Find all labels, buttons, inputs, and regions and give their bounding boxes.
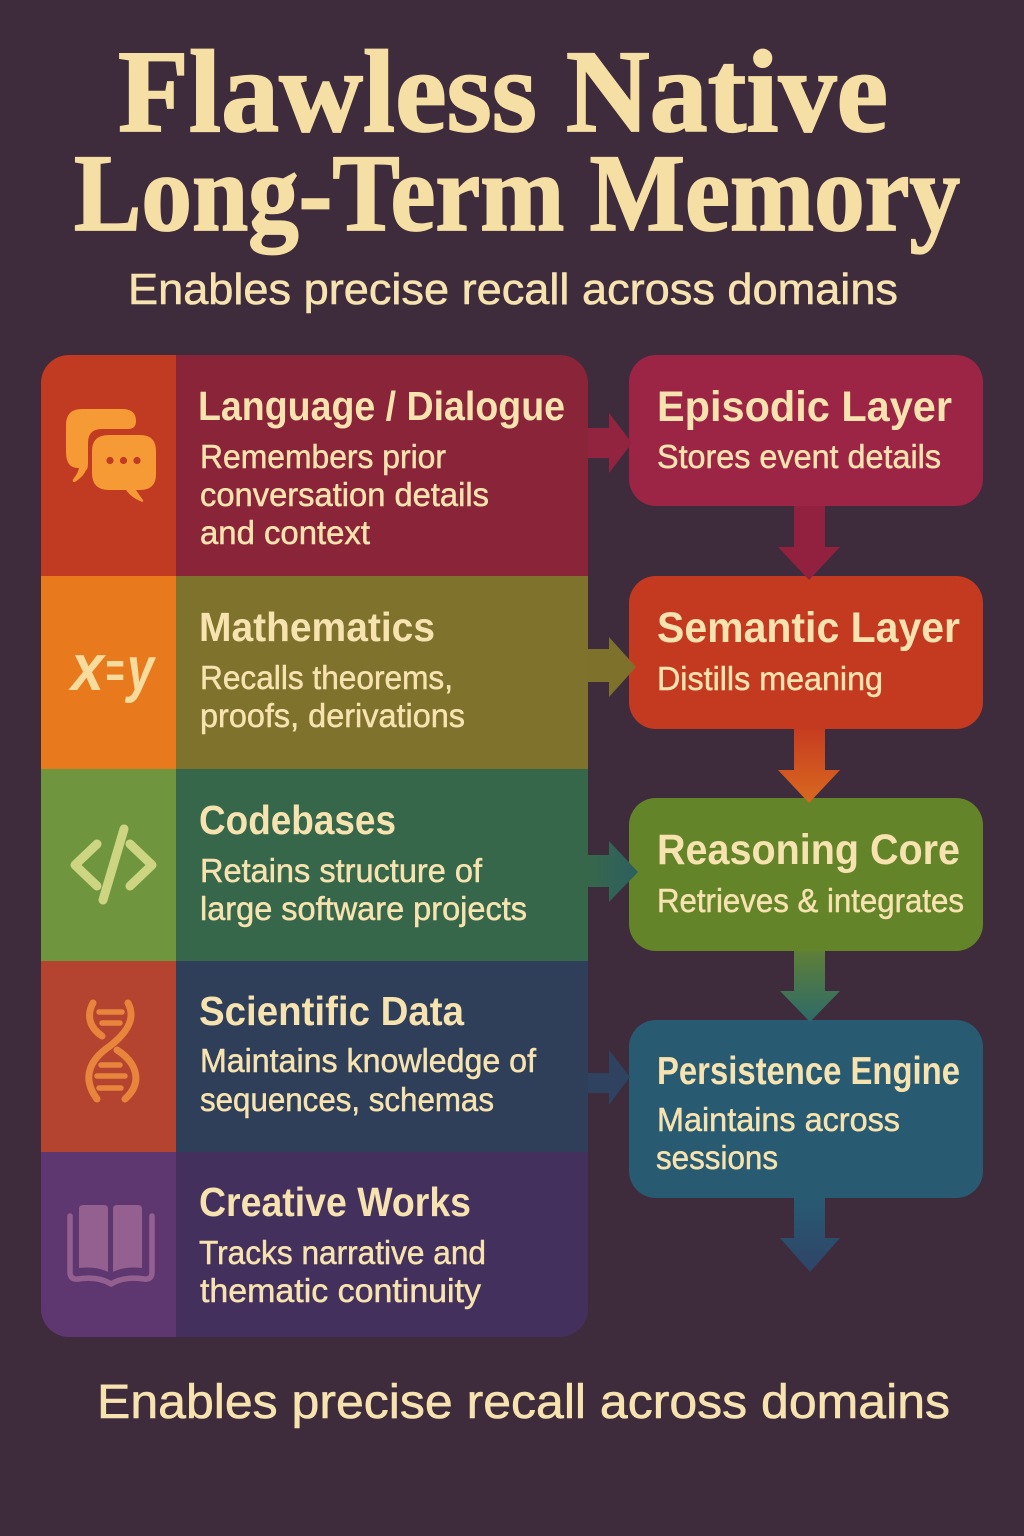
arrow: semantic to reasoning [778, 729, 840, 803]
row: language and dialogue [41, 355, 588, 576]
title [74, 26, 960, 254]
subtitle: Enables precise recall across domains [128, 265, 898, 314]
description: language: conversation details [200, 476, 489, 513]
panel: episodic layer: Stores event details [657, 438, 941, 475]
panel: reasoning core [629, 798, 983, 951]
icon: speech bubbles [66, 409, 156, 502]
icon: x=y [68, 655, 156, 703]
panel: persistence engine [629, 1020, 983, 1198]
row: creative works [41, 1152, 588, 1337]
row: codebases [41, 769, 588, 961]
icon: x=y: = [105, 642, 124, 698]
heading: codebases: Codebases [199, 797, 396, 843]
description: language: Remembers prior [200, 438, 446, 475]
footer: Enables precise recall across domains [97, 1376, 950, 1429]
panel: reasoning core: Reasoning Core [657, 826, 960, 874]
title: Flawless Native [118, 26, 888, 157]
description: creative works [199, 1234, 486, 1309]
description: codebases [200, 852, 527, 927]
icon: x=y: x [68, 630, 106, 704]
description: codebases: Retains structure of [200, 852, 483, 889]
description: codebases: large software projects [200, 890, 527, 927]
panel: episodic layer: Episodic Layer [657, 383, 952, 431]
heading: mathematics: Mathematics [199, 604, 435, 650]
arrow: codebases to reasoning [588, 841, 638, 902]
title: Long-Term Memory [74, 132, 960, 254]
panel: persistence engine: Persistence Engine [657, 1050, 960, 1093]
panel: semantic layer [629, 576, 983, 729]
panel: semantic layer: Semantic Layer [657, 604, 960, 652]
description: creative works: thematic continuity [200, 1272, 481, 1309]
icon: code brackets [75, 829, 152, 900]
icon: dna helix [89, 1003, 136, 1099]
arrow: scientific data to persistence [588, 1050, 630, 1105]
panel: reasoning core: Retrieves & integrates [657, 882, 964, 919]
description: mathematics: Recalls theorems, [200, 659, 453, 696]
arrow: episodic to semantic [778, 506, 840, 580]
description: mathematics: proofs, derivations [200, 697, 465, 734]
panel: persistence engine: sessions [656, 1139, 778, 1176]
description: scientific data: Maintains knowledge of [200, 1042, 537, 1079]
heading: language / dialogue: Language / Dialogue [198, 383, 565, 429]
description: mathematics [200, 659, 465, 734]
panel: episodic layer [629, 355, 983, 506]
icon: open book [70, 1205, 152, 1284]
description: creative works: Tracks narrative and [199, 1234, 486, 1271]
heading: scientific data: Scientific Data [199, 988, 465, 1034]
description: scientific data [200, 1042, 537, 1118]
row: mathematics [41, 576, 588, 769]
panel: semantic layer: Distills meaning [657, 660, 883, 697]
description: scientific data: sequences, schemas [200, 1081, 494, 1118]
icon: x=y: y [125, 635, 157, 704]
panel: memory domains [41, 355, 588, 1337]
panel: persistence engine: Maintains across [657, 1101, 900, 1138]
description: language [201, 444, 488, 544]
arrow: language to episodic [588, 413, 632, 473]
description: language: and context [200, 514, 370, 551]
arrow: reasoning to persistence [780, 951, 840, 1022]
row: scientific data [41, 961, 588, 1152]
heading: creative works: Creative Works [199, 1179, 471, 1225]
arrow: persistence output [780, 1198, 840, 1272]
arrow: mathematics to semantic [588, 637, 636, 697]
